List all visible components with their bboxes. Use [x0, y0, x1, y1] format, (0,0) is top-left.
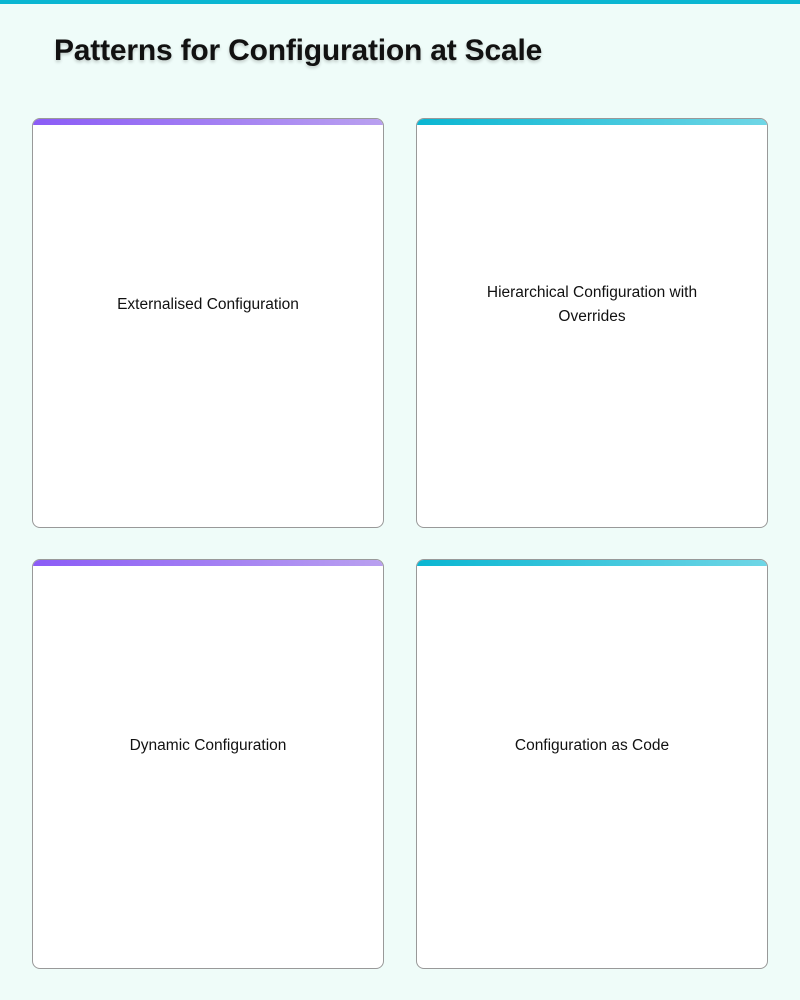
panel: hierarchical	[416, 118, 768, 528]
panel: externalised	[32, 118, 384, 528]
panel: dynamic: Dynamic Configuration	[130, 737, 286, 754]
panel: as code: Configuration as Code	[515, 737, 669, 754]
panel: externalised: Externalised Configuration	[117, 296, 299, 313]
panel: as code	[416, 559, 768, 969]
panel: dynamic	[32, 559, 384, 969]
title: Patterns for Configuration at Scale	[54, 34, 542, 67]
panel: hierarchical: Hierarchical Configuration with Overrides	[487, 284, 697, 325]
